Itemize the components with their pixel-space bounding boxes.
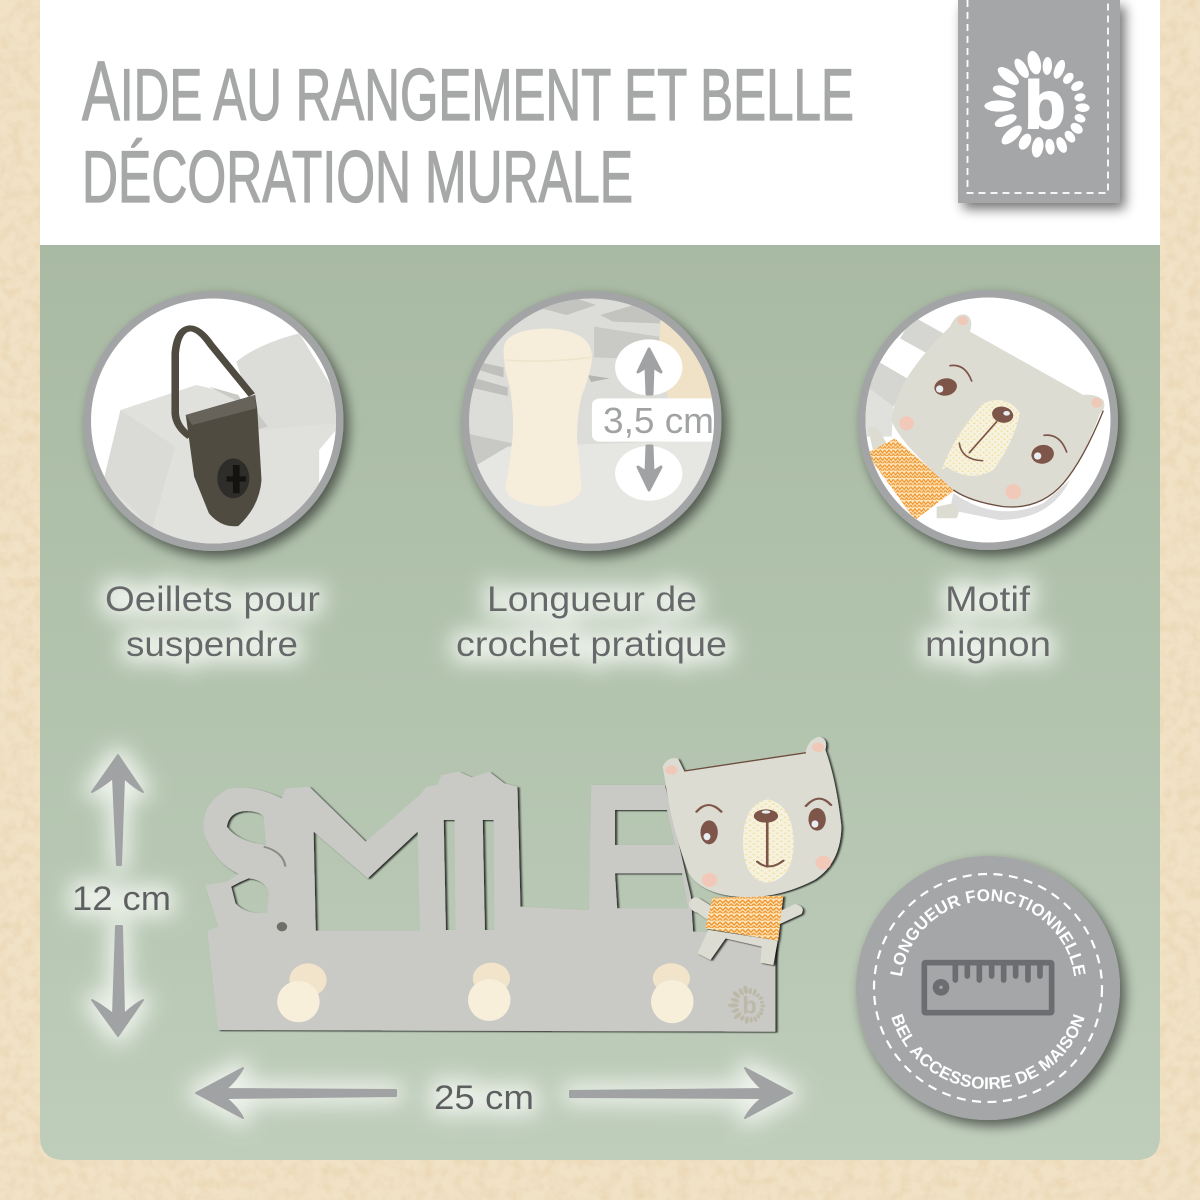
label: cute motif: mignon [925,625,1051,664]
icon: small logo on rack [728,985,765,1024]
icon: wooden peg [504,328,592,507]
label: peg length: crochet pratique [456,625,727,664]
badge bottom text: BEL ACCESSOIRE DE MAISON [892,1014,1084,1090]
panel: green content area [40,245,1160,1160]
icon: small logo on rack: b [742,992,757,1019]
wooden pegs [277,963,694,1023]
icon: brand logo: b [1025,68,1065,143]
sweater [705,896,783,941]
icon: ruler [924,963,1052,1013]
product: SMILE coat rack [203,737,841,1032]
bear arms and legs [689,897,803,965]
label: hanging eyelet: Oeillets pour [105,580,320,619]
arrow down [92,926,143,1036]
icon: bear head [892,314,1104,507]
title: DÉCORATION MURALE [82,137,633,218]
title [82,44,854,218]
panel: cute motif circle [855,288,1125,558]
arrow up [92,755,143,865]
measure value: 3,5 cm [603,400,714,441]
label: peg length [456,580,727,664]
panel: white header [40,0,1160,246]
label: cute motif: Motif [945,580,1030,619]
badge top text: LONGUEUR FONCTIONNELLE [890,889,1086,976]
width value: 25 cm [434,1079,534,1117]
sweater [867,438,955,520]
label: hanging eyelet [105,580,320,664]
badge: functional length [853,854,1133,1134]
rack board and letters [203,772,775,1032]
icon: metal hook [175,328,262,526]
dimension: width [196,1068,792,1118]
label: hanging eyelet: suspendre [126,625,298,664]
wall mount shape [236,334,336,430]
icon: arrow down [638,446,661,490]
label: peg length: Longueur de [487,580,697,619]
measure bubbles [592,339,718,501]
height value: 12 cm [72,880,171,918]
second peg [659,318,716,398]
bear arm [868,427,959,518]
bear head [663,737,841,897]
arrow left [196,1068,396,1118]
bear face [665,743,831,887]
brand tag with logo [958,0,1120,203]
title: AIDE AU RANGEMENT ET BELLE [82,44,854,138]
dimension: height [72,755,171,1036]
arrow right [570,1068,792,1118]
icon: arrow up [638,349,661,394]
label: cute motif [925,580,1051,664]
icon: brand logo [984,49,1090,158]
panel: hanging eyelet circle [80,290,350,560]
panel: peg length circle [460,290,730,560]
bear figure [663,737,841,965]
